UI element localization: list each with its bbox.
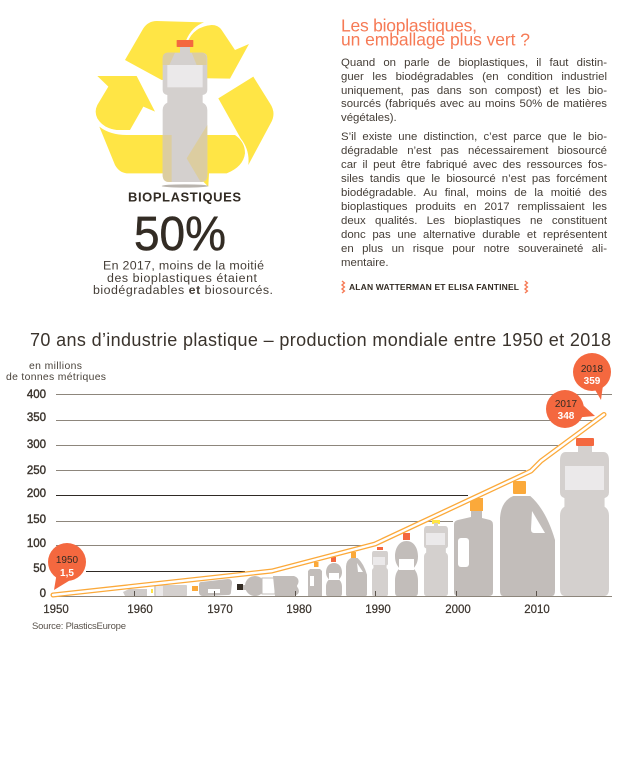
x axis labels: 1980 [286, 604, 312, 616]
x axis labels: 1990 [365, 604, 391, 616]
heading: bioplastiques: BIOPLASTIQUES [128, 190, 241, 204]
callout: 2017: 2017 [555, 399, 578, 410]
bottles: growth illustration [123, 438, 609, 596]
bottle 1975 [237, 576, 299, 596]
bottle 1994 [395, 533, 418, 596]
bottle 1987 [346, 552, 367, 596]
x axis labels: 1950 [43, 604, 69, 616]
text block: first paragraph: Quand on parle de bioplastiques, il faut distin- [341, 57, 607, 69]
text block: first paragraph [341, 57, 607, 124]
y axis labels: 50 [33, 563, 46, 575]
y axis unit: de tonnes métriques [6, 372, 106, 383]
article heading: un emballage plus vert ? [341, 30, 530, 50]
caption: 50 percent explanation: En 2017, moins de la moitié [103, 258, 264, 272]
bottle 1982 [308, 562, 322, 596]
bottle 2007 [500, 481, 555, 596]
icon: central plastic bottle [162, 40, 208, 188]
callout: 2017 [546, 390, 595, 428]
bottle 1969 [192, 579, 232, 596]
callout: 2018: 359 [584, 376, 601, 387]
y axis labels: 100 [27, 538, 46, 550]
bottle 1963 [154, 585, 187, 596]
caption: 50 percent explanation [93, 258, 273, 297]
text block: second paragraph [341, 131, 607, 269]
text block: second paragraph: mentaire. [341, 257, 388, 269]
icon: recycling symbol with bottle [96, 21, 273, 188]
x axis labels: 1960 [127, 604, 153, 616]
icon: right recycling arrow [218, 77, 273, 165]
caption: 50 percent explanation: des bioplastiques étaient [107, 271, 258, 285]
callout: 1950: 1,5 [60, 568, 74, 579]
text block: second paragraph: car il peut être fabriqué avec des ressources fos- [341, 159, 607, 171]
x axis labels: 2010 [524, 604, 550, 616]
icon: left recycling arrow [96, 76, 155, 130]
bottle 1997 [424, 520, 448, 596]
text block: second paragraph: siles tandis que le biosourcé n’est pas forcément [341, 173, 607, 185]
callout: 2018: 2018 [581, 364, 604, 375]
chart: world plastic production [27, 353, 612, 616]
article heading [341, 16, 530, 50]
y axis labels: 400 [27, 389, 46, 401]
text block: first paragraph: uniquement, pas dans son compost) et les bio- [341, 85, 607, 97]
byline: ALAN WATTERMAN ET ELISA FANTINEL [349, 282, 519, 292]
text block: second paragraph: en plus un risque pour notre souveraineté ali- [341, 243, 607, 255]
text block: second paragraph: bioplastiques produits en 2017 remplissaient les [341, 201, 607, 213]
gridlines [56, 394, 612, 596]
caption: 50 percent explanation: biodégradables et biosourcés. [93, 283, 273, 297]
bottle 1985 [326, 557, 342, 596]
y axis labels [27, 389, 46, 600]
text block: first paragraph: guer les biodégradables (en condition industriel [341, 71, 607, 83]
y axis unit: en millions [29, 361, 82, 372]
x axis labels: 1970 [207, 604, 233, 616]
y axis labels: 0 [40, 588, 46, 600]
text block: second paragraph: dégradable n’est pas nécessairement biosourcé [341, 145, 607, 157]
x axis labels: 2000 [445, 604, 471, 616]
big number: 50%: 50% [134, 208, 226, 261]
text block: second paragraph: biodégradable. Au final, moins de la moitié des [341, 187, 607, 199]
callout: 1950: 1950 [56, 555, 79, 566]
chart title: 70 ans d’industrie plastique – production mondiale entre 1950 et 2018 [30, 330, 611, 350]
icon: top recycling arrow [125, 21, 249, 80]
source: Source: PlasticsEurope [32, 621, 126, 632]
icon: bottom recycling arrow [99, 127, 245, 187]
y axis labels: 350 [27, 412, 46, 424]
text block: second paragraph: deux qualités. Les bioplastiques ne constituent [341, 215, 607, 227]
text block: second paragraph: S’il existe une distinction, c’est parce que le bio- [341, 131, 607, 143]
text block: first paragraph: végétales). [341, 112, 397, 124]
bottle 2002 [454, 498, 493, 596]
callout: 1950 [48, 543, 86, 590]
bottle 1960 [123, 589, 153, 596]
text block: first paragraph: sourcés (fabriqués avec au moins 50% de matières [341, 98, 607, 110]
y axis labels: 200 [27, 488, 46, 500]
text block: second paragraph: donc pas une alternative durable et représentent [341, 229, 607, 241]
axis ticks [134, 591, 536, 596]
y axis labels: 300 [27, 439, 46, 451]
y axis labels: 150 [27, 514, 46, 526]
callout: 2017: 348 [558, 411, 575, 422]
y axis unit [6, 361, 106, 383]
production line ribbon [53, 414, 604, 595]
callout: 2018 [573, 353, 611, 400]
bottle 2015 [560, 438, 609, 596]
bottle 1990 [372, 547, 388, 596]
article heading: Les bioplastiques, [341, 16, 477, 36]
x axis labels [43, 604, 550, 616]
y axis labels: 250 [27, 465, 46, 477]
